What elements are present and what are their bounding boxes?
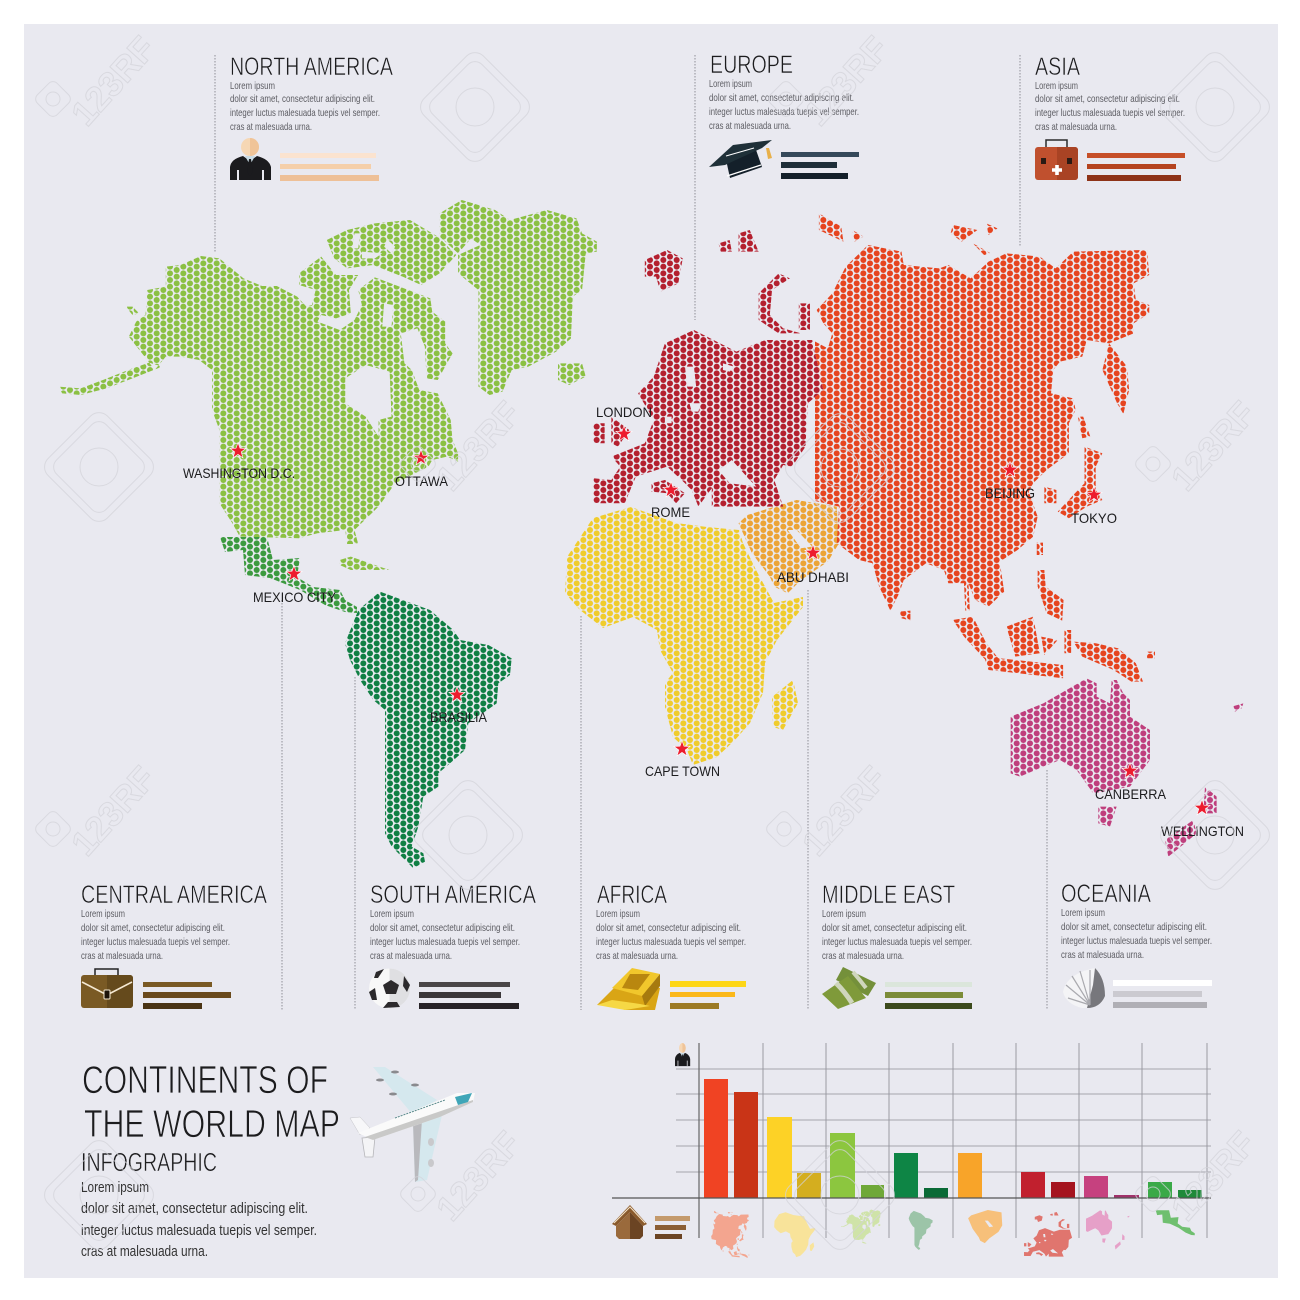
mini map: Middle East — [968, 1210, 1002, 1243]
city marker: Abu Dhabi — [777, 544, 849, 585]
panel: Asia — [1035, 53, 1185, 181]
chart bars — [704, 1079, 1202, 1198]
mini map: North America — [841, 1209, 881, 1244]
panel: North America — [230, 53, 393, 181]
city marker: Canberra: CANBERRA — [1095, 786, 1167, 802]
city marker: Beijing — [985, 462, 1035, 501]
text block: Europe: cras at malesuada urna. — [709, 120, 791, 132]
heading: Europe: EUROPE — [710, 51, 793, 79]
icon: gold bars — [597, 968, 660, 1010]
text block: Africa: cras at malesuada urna. — [596, 950, 678, 962]
dotted map: North America — [55, 198, 605, 570]
bars: Middle East — [885, 982, 972, 1009]
city marker: Wellington: WELLINGTON — [1161, 823, 1244, 839]
heading: Central America: CENTRAL AMERICA — [81, 881, 267, 909]
intro text block: Lorem ipsum — [81, 1179, 149, 1196]
city marker: Abu Dhabi: ABU DHABI — [777, 569, 849, 585]
title — [82, 1059, 340, 1146]
title: CONTINENTS OF — [82, 1059, 328, 1102]
icon: house — [612, 1205, 647, 1239]
text block: Central America: dolor sit amet, consectetur adipiscing elit. — [81, 922, 225, 934]
intro text block: cras at malesuada urna. — [81, 1243, 208, 1260]
mini map: Asia — [711, 1211, 749, 1258]
city marker: Beijing: BEIJING — [985, 485, 1035, 501]
mini map: Central America — [1156, 1210, 1195, 1235]
icon: soccer ball — [369, 968, 410, 1008]
city marker: Washington D.C.: WASHINGTON D.C. — [183, 465, 295, 481]
city marker: Wellington — [1161, 800, 1244, 839]
text block: Central America: integer luctus malesuada tuepis vel semper. — [81, 936, 230, 948]
text block: Asia: cras at malesuada urna. — [1035, 121, 1117, 133]
city marker: Brasilia — [430, 686, 488, 725]
dotted map: Europe — [590, 225, 825, 510]
text block: North America: integer luctus malesuada tuepis vel semper. — [230, 107, 380, 119]
bars: Asia — [1087, 153, 1185, 181]
text block: Middle East: dolor sit amet, consectetur adipiscing elit. — [822, 922, 967, 934]
icon: banknotes — [822, 967, 876, 1009]
bars: North America — [280, 153, 379, 181]
text block: Asia: Lorem ipsum — [1035, 80, 1078, 92]
panel: South America — [369, 881, 536, 1009]
text block: Asia: integer luctus malesuada tuepis vel semper. — [1035, 107, 1185, 119]
panel: Central America — [81, 881, 267, 1009]
mini map: Africa — [774, 1212, 815, 1257]
city marker: Ottawa: OTTAWA — [395, 473, 449, 489]
text block: Europe: integer luctus malesuada tuepis vel semper. — [709, 106, 859, 118]
text block: Oceania: cras at malesuada urna. — [1061, 949, 1144, 961]
text block: Middle East: integer luctus malesuada tuepis vel semper. — [822, 936, 972, 948]
text block: South America: dolor sit amet, consectetur adipiscing elit. — [370, 922, 515, 934]
icon: businessman — [230, 138, 271, 180]
subtitle: INFOGRAPHIC — [81, 1147, 217, 1177]
text block: Central America: cras at malesuada urna. — [81, 950, 163, 962]
intro text block — [81, 1179, 317, 1260]
dotted map: Middle East — [735, 498, 840, 595]
city marker: Cape Town — [645, 740, 720, 779]
heading: Oceania: OCEANIA — [1061, 880, 1151, 908]
text block: Oceania: Lorem ipsum — [1061, 907, 1105, 919]
main title block — [81, 1059, 340, 1260]
icon: seashell — [1063, 968, 1105, 1008]
text block: South America: Lorem ipsum — [370, 908, 414, 920]
icon: airplane — [350, 1067, 475, 1182]
mini map: Europe — [1024, 1212, 1072, 1257]
bar chart — [612, 1043, 1211, 1258]
text block: Africa: integer luctus malesuada tuepis vel semper. — [596, 936, 746, 948]
bars: Central America — [143, 982, 231, 1009]
dotted column dividers — [215, 55, 1047, 1010]
heading: Middle East: MIDDLE EAST — [822, 881, 955, 909]
icon: graduation cap — [709, 140, 772, 178]
text block: Central America — [81, 908, 230, 962]
city marker: Brasilia: BRASILIA — [430, 709, 488, 725]
text block: Africa: Lorem ipsum — [596, 908, 640, 920]
text block: Middle East: cras at malesuada urna. — [822, 950, 904, 962]
text block: Middle East: Lorem ipsum — [822, 908, 866, 920]
city marker: Cape Town: CAPE TOWN — [645, 763, 720, 779]
heading: North America: NORTH AMERICA — [230, 53, 393, 81]
city marker: Tokyo — [1071, 486, 1117, 526]
text block: South America: integer luctus malesuada tuepis vel semper. — [370, 936, 520, 948]
heading: Asia: ASIA — [1035, 53, 1080, 81]
text block: Oceania: dolor sit amet, consectetur adipiscing elit. — [1061, 921, 1207, 933]
text block: Europe — [709, 78, 859, 132]
text block: Africa: dolor sit amet, consectetur adipiscing elit. — [596, 922, 741, 934]
text block: South America — [370, 908, 520, 962]
bars: Europe — [781, 152, 859, 179]
icon: chart person — [675, 1043, 690, 1066]
city marker: Canberra — [1095, 762, 1167, 802]
intro text block: dolor sit amet, consectetur adipiscing elit. — [81, 1200, 308, 1217]
text block: Europe: Lorem ipsum — [709, 78, 752, 90]
panel: Oceania — [1061, 880, 1212, 1008]
text block: North America — [230, 80, 380, 133]
text block: Asia: dolor sit amet, consectetur adipiscing elit. — [1035, 93, 1180, 105]
panel: Europe — [709, 51, 859, 179]
text block: Africa — [596, 908, 746, 962]
dotted map: Africa — [562, 505, 806, 767]
text block: Europe: dolor sit amet, consectetur adipiscing elit. — [709, 92, 854, 104]
city marker: Mexico City: MEXICO CITY — [253, 589, 337, 605]
mini map: Oceania — [1086, 1210, 1129, 1249]
dotted map: Oceania — [1008, 676, 1248, 860]
heading: South America: SOUTH AMERICA — [370, 881, 536, 909]
intro text block: integer luctus malesuada tuepis vel semper. — [81, 1222, 317, 1239]
dotted map: Asia — [815, 210, 1155, 685]
bars: South America — [419, 982, 519, 1009]
city marker: Tokyo: TOKYO — [1071, 510, 1117, 526]
text block: Middle East — [822, 908, 972, 962]
text block: Central America: Lorem ipsum — [81, 908, 125, 920]
text block: North America: Lorem ipsum — [230, 80, 275, 92]
text block: Oceania — [1061, 907, 1212, 961]
text block: Oceania: integer luctus malesuada tuepis vel semper. — [1061, 935, 1212, 947]
icon: briefcase — [81, 969, 133, 1008]
city marker: Ottawa — [395, 450, 449, 489]
city marker: Rome — [651, 482, 690, 520]
city marker: Washington D.C. — [183, 442, 295, 481]
city marker: London: LONDON — [596, 404, 652, 420]
panel: Middle East — [822, 881, 972, 1009]
text block: North America: cras at malesuada urna. — [230, 121, 312, 133]
bars: Oceania — [1113, 980, 1212, 1008]
title: THE WORLD MAP — [84, 1103, 340, 1146]
icon: first aid case — [1035, 140, 1078, 180]
text block: South America: cras at malesuada urna. — [370, 950, 452, 962]
heading: Africa: AFRICA — [597, 881, 667, 909]
chart grid — [676, 1043, 1211, 1238]
dotted map: South America — [342, 590, 517, 872]
text block: Asia — [1035, 80, 1185, 133]
mini map: South America — [909, 1211, 933, 1250]
city marker: London — [596, 404, 652, 441]
house legend bars — [655, 1216, 690, 1239]
city marker: Mexico City — [253, 566, 337, 605]
panel: Africa — [596, 881, 746, 1010]
bars: Africa — [670, 981, 746, 1009]
text block: North America: dolor sit amet, consectetur adipiscing elit. — [230, 93, 375, 105]
chart axis — [612, 1197, 1211, 1199]
dotted map: Central America — [218, 535, 360, 615]
city marker: Rome: ROME — [651, 504, 690, 520]
